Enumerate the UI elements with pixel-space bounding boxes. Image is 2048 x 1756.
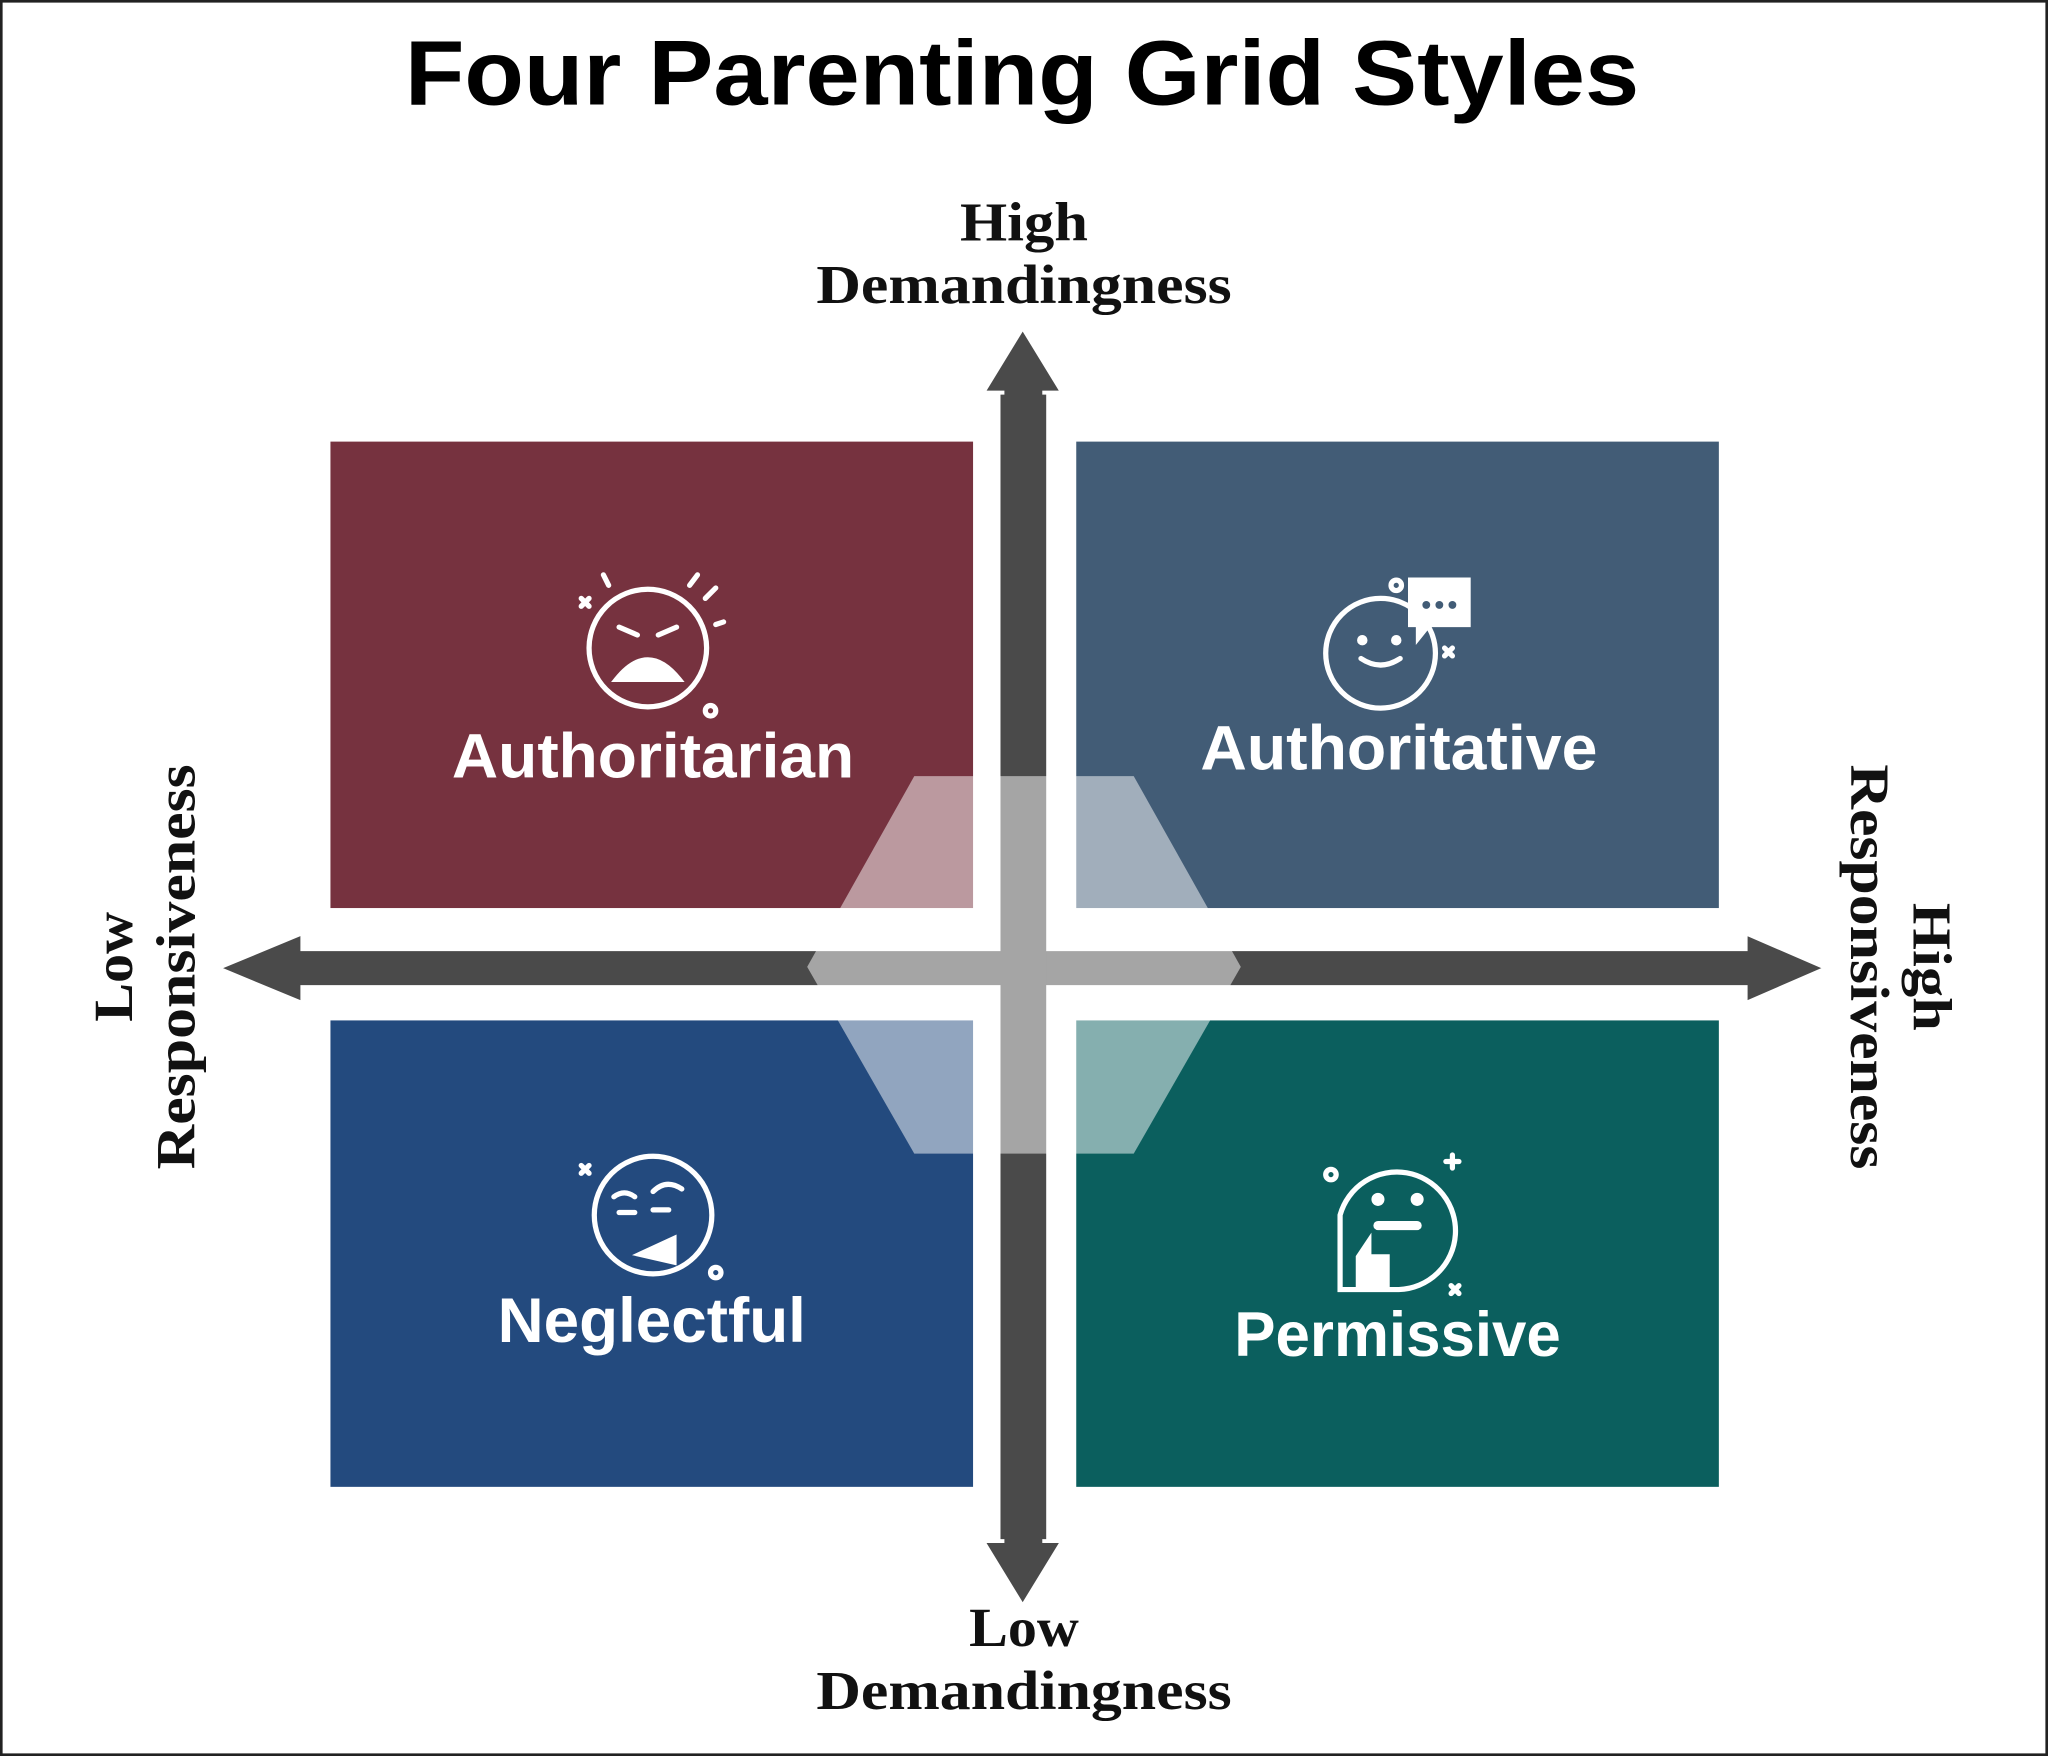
- arrow: horizontal responsiveness axis: [213, 930, 1831, 1006]
- label: authoritative: Authoritative: [1200, 714, 1597, 784]
- hexagon overlay: [807, 776, 1241, 1154]
- icon: talking face: [1326, 580, 1468, 708]
- arrow: vertical demandingness axis: [980, 324, 1066, 1610]
- label: high demandingness: Demandingness: [816, 254, 1232, 315]
- label: low demandingness: Demandingness: [816, 1660, 1232, 1721]
- label: high demandingness: High: [960, 191, 1088, 252]
- panel: permissive: [1076, 1020, 1719, 1487]
- icon: angry face: [581, 575, 724, 716]
- panel: neglectful: [330, 1020, 973, 1487]
- panel: authoritative: [1076, 442, 1719, 908]
- label: low demandingness: Low: [969, 1597, 1079, 1658]
- title: Four Parenting Grid Styles: [405, 23, 1639, 125]
- label: low responsiveness: Responsiveness: [146, 764, 207, 1169]
- panel: authoritarian: [330, 442, 973, 908]
- icon: thumbs up face: [1326, 1155, 1459, 1293]
- label: high responsiveness: Responsiveness: [1839, 764, 1900, 1169]
- label: permissive: Permissive: [1234, 1300, 1561, 1370]
- icon: bored face: [581, 1156, 721, 1278]
- label: neglectful: Neglectful: [498, 1286, 806, 1356]
- label: authoritarian: Authoritarian: [452, 721, 854, 791]
- label: low responsiveness: Low: [83, 912, 144, 1022]
- label: high responsiveness: High: [1901, 903, 1962, 1031]
